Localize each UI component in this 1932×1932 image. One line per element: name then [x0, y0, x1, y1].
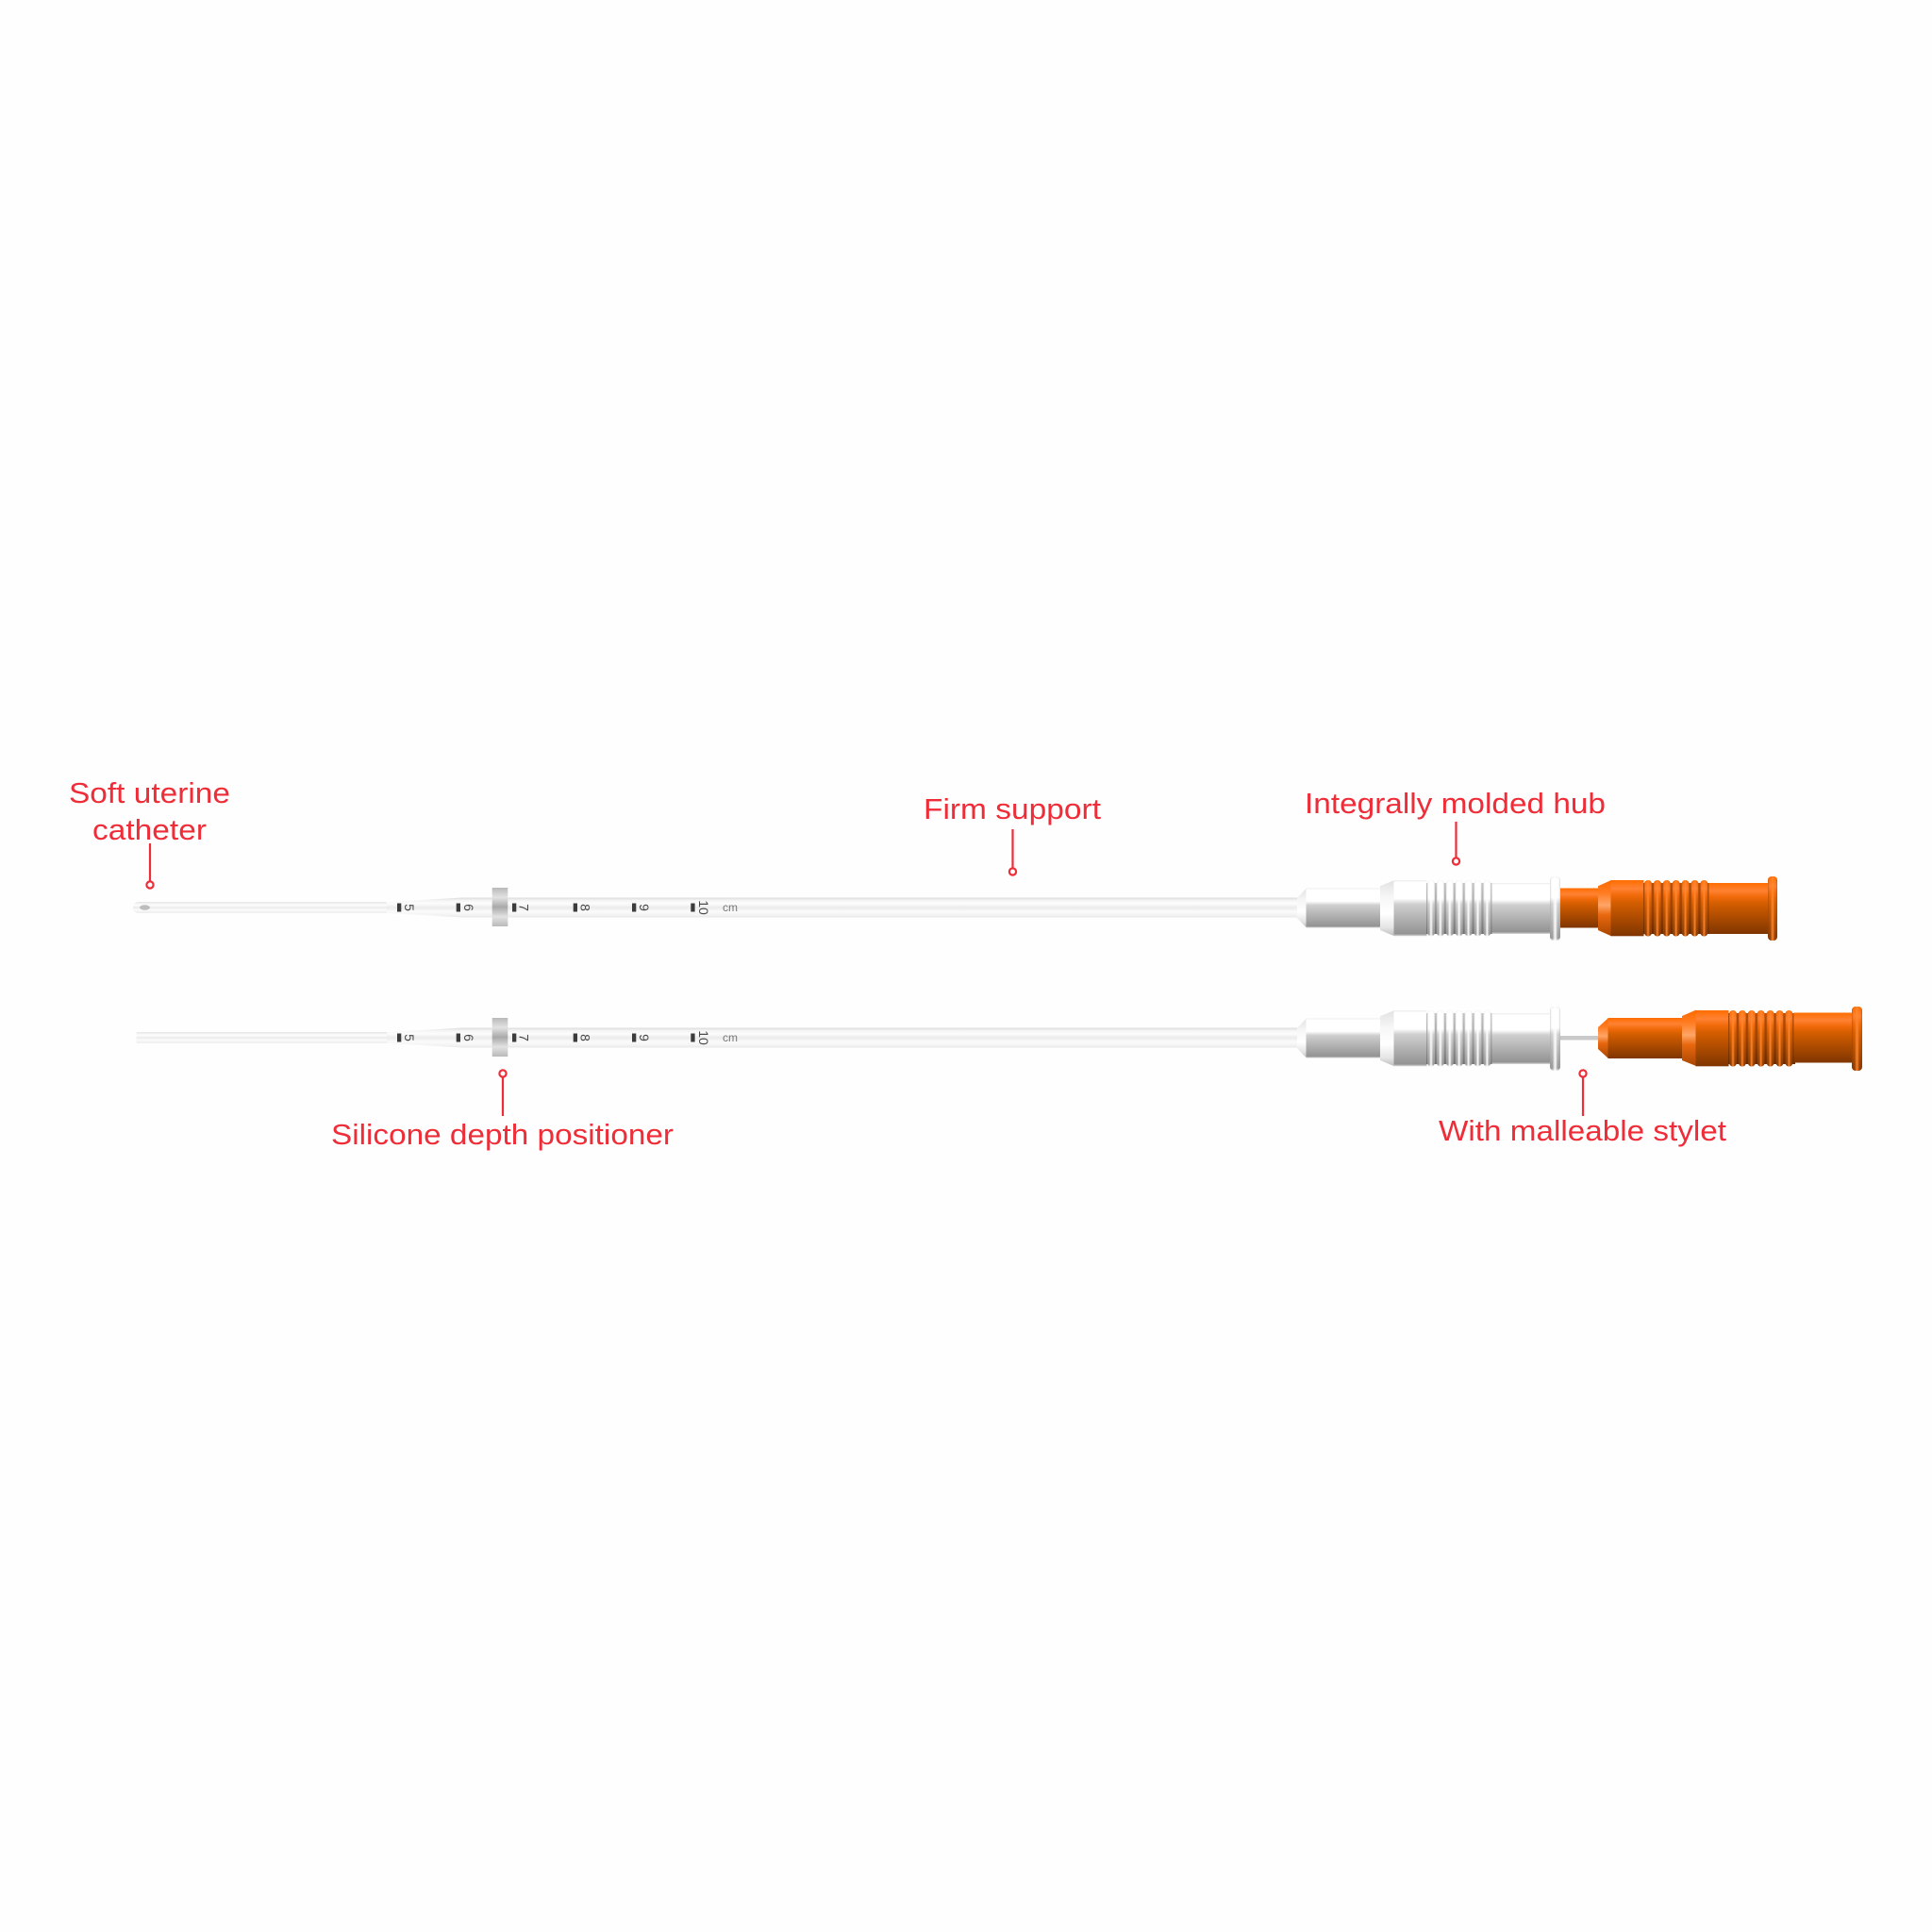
depth scale: 9	[637, 1034, 652, 1041]
callout: firm support	[924, 792, 1101, 875]
depth scale: cm	[723, 1031, 738, 1044]
white hub	[1297, 1007, 1560, 1071]
depth scale	[397, 900, 738, 915]
depth scale: 10	[696, 1030, 711, 1045]
callout: with malleable stylet: With malleable stylet	[1439, 1114, 1726, 1147]
catheter: bottom, with stylet withdrawn	[136, 1007, 1862, 1071]
silicone depth positioner	[492, 888, 508, 926]
depth scale: 6	[461, 904, 476, 911]
callout: soft uterine catheter	[69, 776, 230, 889]
depth scale: cm	[723, 901, 738, 914]
orange stylet handle seated in hub	[1560, 876, 1777, 941]
silicone depth positioner	[492, 1018, 508, 1057]
depth scale: 8	[578, 1034, 593, 1041]
firm tapered tube	[387, 1028, 1298, 1047]
callout: firm support: Firm support	[924, 792, 1101, 825]
catheter: top, with stylet seated in hub	[133, 876, 1777, 941]
depth scale: 5	[402, 1034, 417, 1041]
depth scale: 7	[517, 904, 532, 911]
orange stylet handle	[1598, 1007, 1862, 1071]
malleable stylet wire	[1560, 1036, 1599, 1040]
callout: soft uterine catheter: catheter	[92, 813, 207, 846]
callout: integrally molded hub	[1305, 787, 1606, 865]
depth scale: 10	[696, 900, 711, 915]
firm tapered tube	[387, 898, 1298, 917]
depth scale: 8	[578, 904, 593, 911]
callout: silicone depth positioner	[331, 1070, 674, 1151]
depth scale: 6	[461, 1034, 476, 1041]
callout: integrally molded hub: Integrally molded hub	[1305, 787, 1606, 820]
depth scale: 9	[637, 904, 652, 911]
soft tube	[136, 1032, 389, 1043]
callout: soft uterine catheter: Soft uterine	[69, 776, 230, 809]
depth scale: 5	[402, 904, 417, 911]
depth scale: 7	[517, 1034, 532, 1041]
depth scale	[397, 1030, 738, 1045]
white hub	[1297, 876, 1560, 941]
callout: silicone depth positioner: Silicone depth positioner	[331, 1118, 674, 1151]
soft uterine tube with tip	[133, 902, 390, 913]
callout: with malleable stylet	[1439, 1070, 1726, 1147]
tip side hole	[140, 905, 150, 910]
